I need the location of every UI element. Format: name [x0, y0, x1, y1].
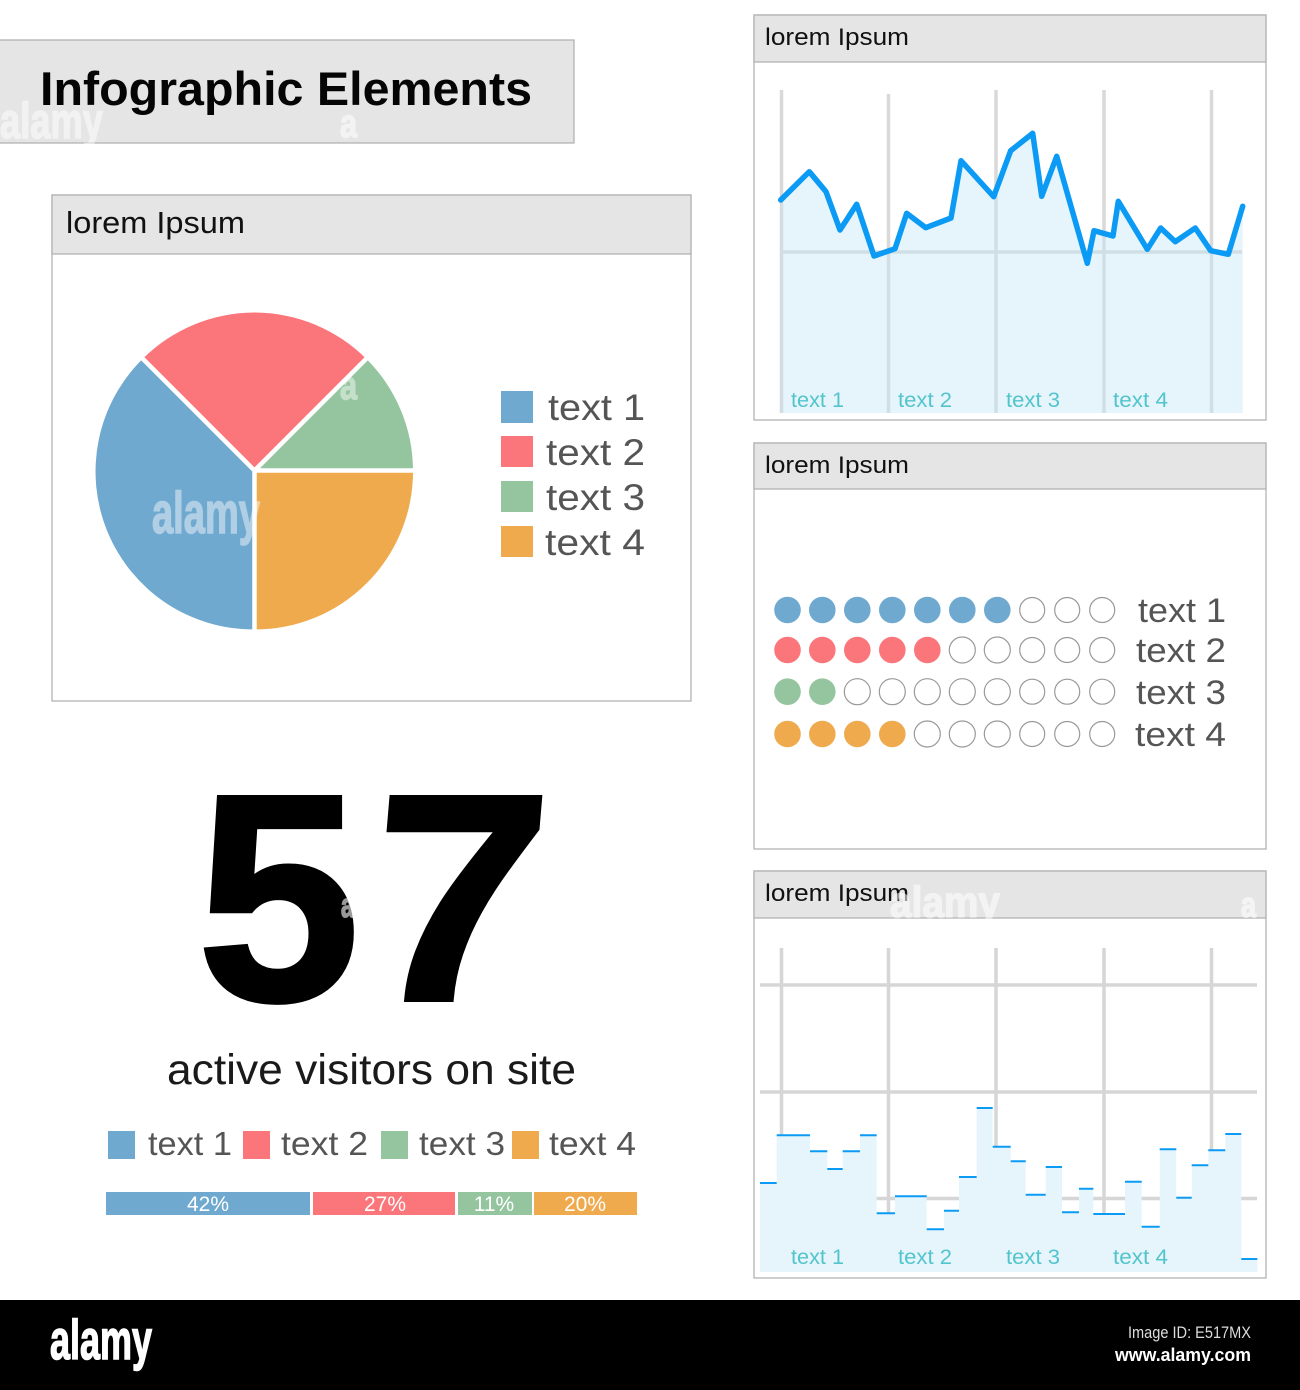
- step chart: text 2: [898, 1246, 952, 1269]
- line chart: text 2: [898, 389, 952, 412]
- panel heading: dot rating: lorem Ipsum: [765, 452, 909, 479]
- big number: 7: [356, 732, 559, 1063]
- big number: 5: [197, 733, 360, 1063]
- step chart: text 3: [1006, 1246, 1060, 1269]
- footer image id: Image ID: E517MX: [1128, 1323, 1251, 1342]
- caption: active visitors: active visitors on site: [167, 1046, 576, 1094]
- dot row: text 3: [774, 674, 1226, 712]
- footer bar: [0, 1300, 1300, 1390]
- pie legend: text 4: [545, 522, 645, 563]
- panel heading: pie chart: [52, 195, 691, 254]
- panel heading: step chart: a: [1241, 884, 1257, 925]
- pie chart: a: [340, 364, 358, 408]
- pie legend: text 3: [546, 477, 645, 518]
- panel: step chart: [754, 871, 1266, 1278]
- panel heading: step chart: [754, 871, 1266, 927]
- panel heading: dot rating: [754, 443, 1266, 489]
- stacked percentage bar: 42%: [187, 1193, 229, 1216]
- panel heading: line chart: lorem Ipsum: [765, 24, 909, 51]
- panel: pie chart: [52, 195, 691, 701]
- line chart: text 4: [1113, 389, 1168, 412]
- title banner: Infographic Elements: [40, 62, 532, 115]
- line chart: text 1: [791, 389, 844, 412]
- big number: a: [341, 887, 355, 925]
- stacked percentage bar: 27%: [364, 1193, 406, 1216]
- pie legend: text 2: [546, 432, 645, 473]
- stacked bar legend: text 2: [281, 1125, 368, 1162]
- dot row: text 2: text 2: [1136, 632, 1226, 670]
- panel heading: line chart: [754, 15, 1266, 62]
- stacked bar legend: text 1: [148, 1125, 232, 1162]
- dot row: text 1: text 1: [1138, 592, 1226, 630]
- dot row: text 2: [774, 632, 1226, 670]
- stacked percentage bar: [106, 1192, 637, 1216]
- stacked percentage bar: 11%: [474, 1193, 514, 1216]
- big number: [197, 732, 559, 1063]
- line chart: text 3: [1006, 389, 1060, 412]
- panel: line chart: [754, 15, 1266, 420]
- dot row: text 4: text 4: [1135, 716, 1226, 754]
- title banner: a: [340, 102, 358, 146]
- step chart: [760, 948, 1257, 1272]
- title banner: [0, 40, 574, 149]
- dot row: text 3: text 3: [1136, 674, 1226, 712]
- pie chart: alamy: [152, 481, 260, 546]
- footer logo: alamy: [50, 1308, 152, 1371]
- step chart: text 1: [791, 1246, 844, 1269]
- panel: dot rating: [754, 443, 1266, 849]
- panel heading: step chart: lorem Ipsum: [765, 880, 909, 907]
- footer website: www.alamy.com: [1114, 1345, 1251, 1365]
- panel heading: pie chart: lorem Ipsum: [66, 205, 245, 240]
- pie legend: [501, 387, 645, 563]
- dot row: text 1: [774, 592, 1226, 630]
- panel heading: step chart: alamy: [890, 878, 1000, 927]
- title banner: alamy: [0, 93, 103, 149]
- stacked percentage bar: 20%: [564, 1193, 606, 1216]
- stacked bar legend: [108, 1125, 636, 1162]
- step chart: text 4: [1113, 1246, 1168, 1269]
- line chart: [781, 90, 1243, 413]
- pie chart: [96, 313, 416, 632]
- stacked bar legend: text 3: [419, 1125, 505, 1162]
- dot row: text 4: [774, 716, 1226, 754]
- stacked bar legend: text 4: [549, 1125, 636, 1162]
- pie legend: text 1: [548, 387, 645, 428]
